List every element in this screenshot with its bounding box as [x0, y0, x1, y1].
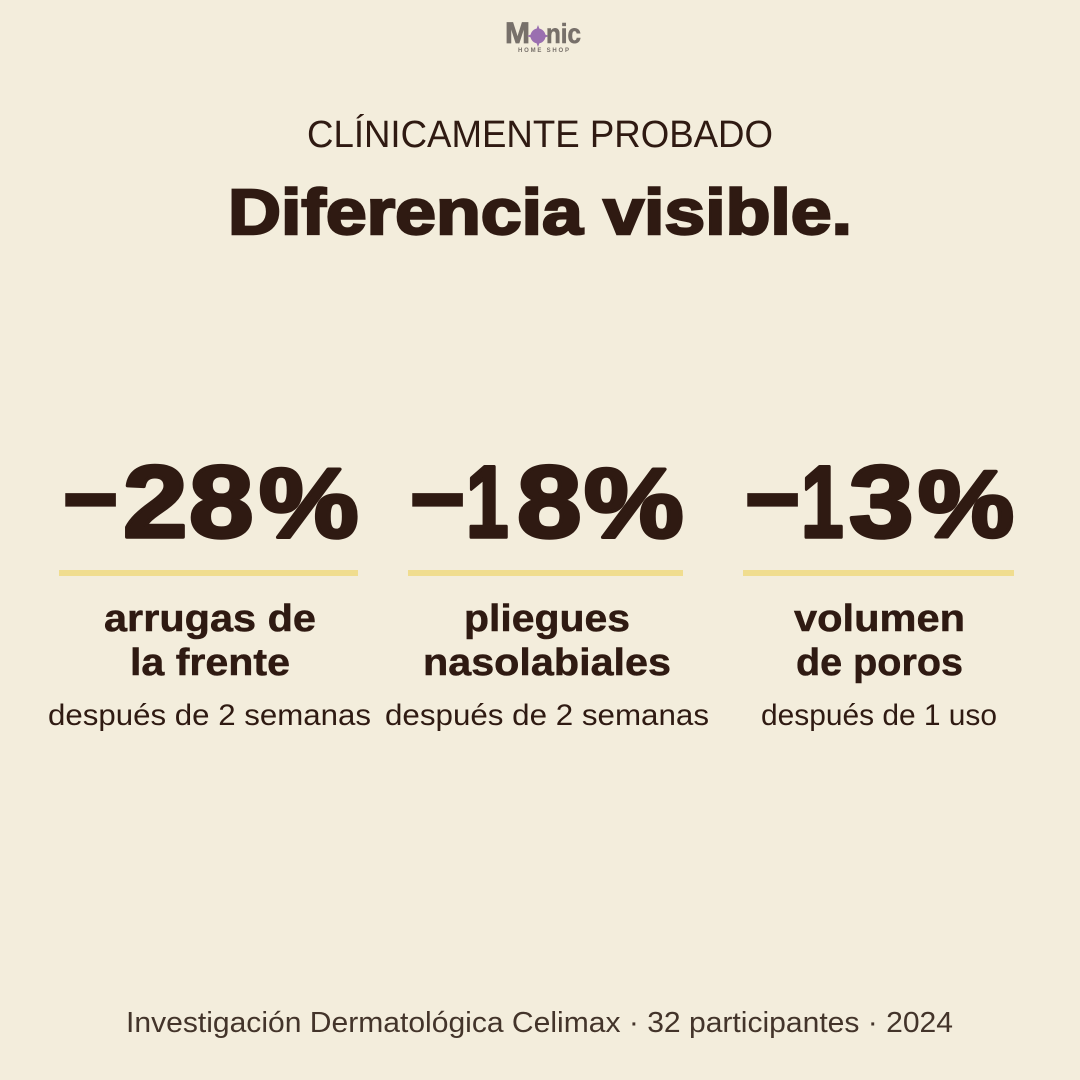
logo: Monic Home Shop: nic: [546, 18, 581, 49]
stat: -18%: −: [411, 454, 464, 545]
underline: [59, 570, 358, 576]
title: Diferencia visible.: [228, 177, 852, 248]
timeframe: después de 2 semanas: [48, 699, 371, 732]
panel: volumen de poros: [743, 445, 1014, 732]
label: la frente: [130, 642, 290, 684]
stat: -28%: %: [259, 449, 359, 558]
underline: [743, 570, 1014, 576]
stat: -18%: 1: [466, 445, 509, 560]
logo: Monic Home Shop: [505, 17, 581, 54]
panel: arrugas de la frente: [48, 445, 371, 732]
logo: Monic Home Shop: HOME SHOP: [518, 48, 569, 54]
stat: -28%: 8: [189, 445, 254, 559]
stat: -28%: [64, 445, 359, 559]
timeframe: después de 1 uso: [761, 699, 997, 732]
stat: -13%: −: [746, 454, 799, 545]
stat: -13%: 1: [801, 445, 844, 560]
logo: Monic Home Shop: M: [505, 17, 530, 50]
eyebrow heading: CLÍNICAMENTE PROBADO: [307, 113, 773, 156]
stat: -18%: 8: [517, 445, 582, 559]
stat: -18%: [411, 445, 684, 560]
stat: -28%: −: [64, 454, 117, 545]
label: arrugas de: [104, 598, 316, 640]
label: [423, 598, 671, 684]
label: de poros: [796, 642, 963, 684]
label: [794, 598, 965, 684]
source footnote: Investigación Dermatológica Celimax · 32 participantes · 2024: [126, 1007, 953, 1039]
timeframe: después de 2 semanas: [385, 699, 709, 732]
label: nasolabiales: [423, 642, 671, 684]
stat: -13%: %: [918, 451, 1014, 558]
label: volumen: [794, 598, 965, 640]
panel: pliegues nasolabiales: [385, 445, 709, 732]
stat: -13%: [746, 445, 1014, 560]
stat: -18%: %: [584, 449, 684, 558]
stat: -28%: 2: [123, 445, 188, 559]
label: pliegues: [464, 598, 630, 640]
label: [104, 598, 316, 684]
underline: [408, 570, 683, 576]
stat: -13%: 3: [849, 445, 914, 559]
